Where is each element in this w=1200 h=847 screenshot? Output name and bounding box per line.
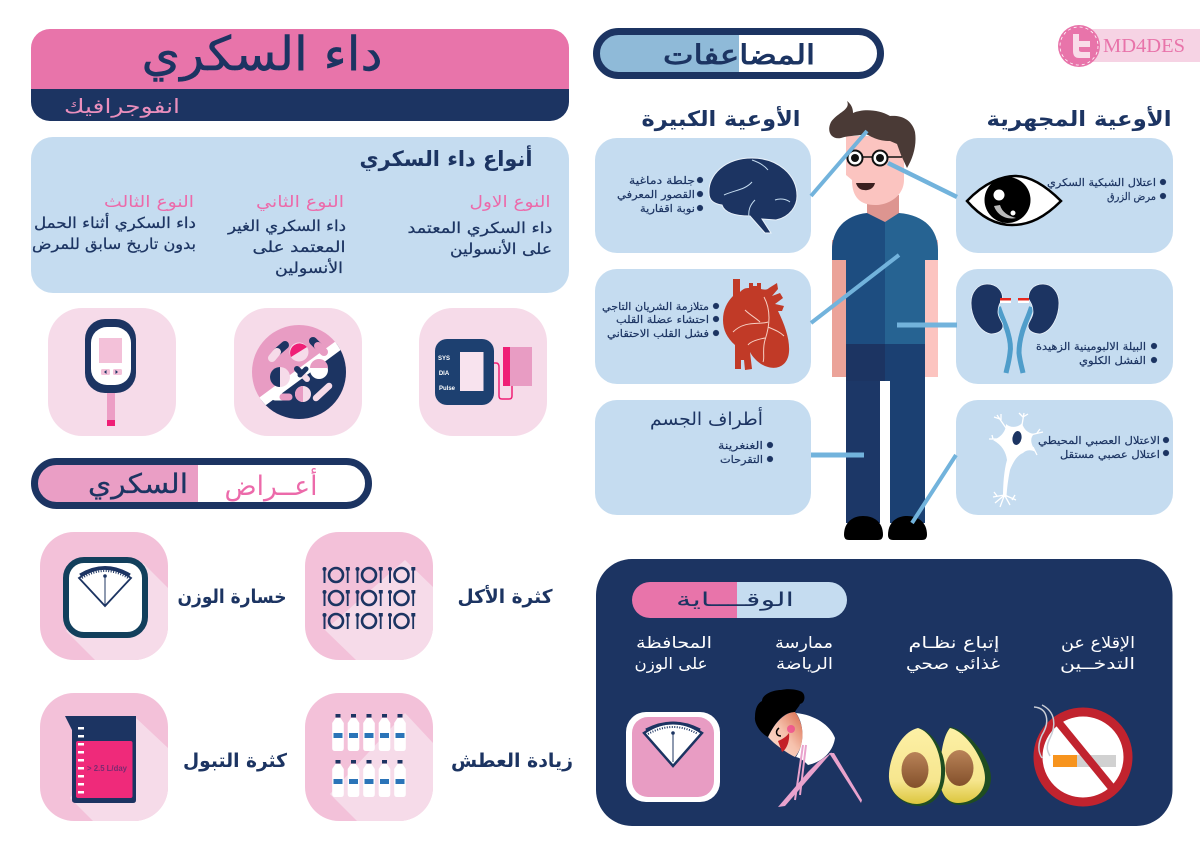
label: exercise: ممارسة [775,633,833,653]
logo: MD4DES: MD4DES [1103,35,1185,57]
panel: diabetes types [31,137,569,293]
icon: avocado [889,727,991,806]
label: exercise: الرياضة [776,654,833,674]
icon: blood pressure monitor tile [419,308,547,436]
panel: limbs complications [595,400,811,515]
list: eye conditions: اعتلال الشبكية السكري [1047,177,1156,189]
label: weight loss: خسارة الوزن [178,586,286,608]
trousers [846,344,925,523]
column: type two: المعتمد على [252,238,346,256]
column: type two: داء السكري الغير [227,217,346,236]
heading pill: complications: المضاعفات [663,40,815,71]
label: healthy diet: إتباع نظـام [908,633,1000,653]
glasses [848,150,902,166]
list: nerve conditions [1038,435,1169,461]
icon: neuron [989,413,1043,507]
column: type two: الأنسولين [275,258,343,277]
heading pill: symptoms: السكري [88,469,188,500]
list: kidney conditions: الفشل الكلوي [1079,355,1146,367]
list: heart conditions: فشل القلب الاحتقاني [607,328,709,340]
label: healthy diet: غذائي صحي [906,654,1000,674]
monitor labels: DIA [439,371,450,377]
list: limb conditions [718,440,773,466]
list: eye conditions: مرض الزرق [1107,191,1156,203]
icon: glucometer tile [48,308,176,436]
heading: limbs: أطراف الجسم [650,407,763,430]
logo: MD4DES [1058,25,1200,67]
list: limb conditions: التقرحات [720,454,763,466]
label: overeating: كثرة الأكل [458,585,553,608]
list: brain conditions [617,175,703,215]
icon: pills tile [234,308,362,436]
label: maintain weight [634,633,712,674]
panel: title banner [31,27,569,121]
heading pill: symptoms [34,461,369,506]
label: maintain weight: على الوزن [634,654,708,674]
column: type three: داء السكري أثناء الحمل [34,213,196,233]
connector lines [811,131,957,523]
label: quit smoking: الإقلاع عن [1061,633,1135,653]
monitor labels [438,356,456,392]
icon: no smoking [1034,705,1128,802]
column: type three [32,192,196,253]
heading: microvascular: الأوعية المجهرية [986,105,1172,131]
shoes [844,516,927,540]
icon: measuring beaker tile [40,693,168,821]
icon: water bottles tile [305,693,433,821]
list: kidney conditions [1036,341,1157,367]
heading pill: prevention: الوقــــاية [676,589,794,611]
column: type two [227,192,346,277]
label: increased thirst: زيادة العطش [451,750,573,772]
list: brain conditions: القصور المعرفي [617,189,695,201]
heading pill: complications [596,31,881,76]
list: heart conditions: احتشاء عضلة القلب [616,314,709,326]
column: type one [408,192,552,258]
icon: eye [967,176,1061,225]
arms [832,240,938,377]
column: type two: النوع الثاني [256,192,344,212]
list: brain conditions: جلطة دماغية [629,175,695,187]
label: frequent urination: كثرة التبول [183,750,288,772]
icon: kidneys [971,284,1059,373]
monitor labels: SYS [438,356,450,362]
column: type one: داء السكري المعتمد [408,219,552,238]
panel: prevention [596,559,1172,826]
panel: kidney complications [956,269,1173,384]
list: brain conditions: نوبة اقفارية [640,203,695,215]
icon: pink weight scale [626,712,720,802]
icon: weight scale tile [40,532,168,660]
beaker reading: > 2.5 L/day [87,763,127,773]
list: heart conditions [602,301,719,340]
subtitle: انفوجرافيك [64,94,180,118]
label: quit smoking: التدخــين [1060,654,1135,674]
panel: brain complications [595,138,811,253]
panel: eye complications [956,138,1173,253]
label: quit smoking [1060,633,1135,674]
list: heart conditions: متلازمة الشريان التاجي [602,301,709,313]
column: type three: بدون تاريخ سابق للمرض [32,235,196,253]
icon: brain [709,158,797,233]
list: kidney conditions: البيلة الالبومينية الزهيدة [1036,341,1146,353]
shirt [832,213,938,344]
heading pill: prevention [632,582,847,618]
column: type three: النوع الثالث [104,192,194,212]
column: type one: النوع الاول [470,192,550,212]
label: maintain weight: المحافظة [636,633,712,652]
panel: heart complications [595,269,811,384]
heading pill: symptoms: أعــراض [224,467,318,502]
face [846,136,904,205]
label: healthy diet [906,633,1000,674]
monitor labels: Pulse [439,386,456,392]
title: داء السكري [142,27,382,82]
column: type one: على الأنسولين [450,239,552,258]
label: exercise [775,633,833,674]
icon: heart [723,279,789,370]
icon: exercising woman [755,689,862,807]
mouth [856,183,875,190]
heading: macrovascular: الأوعية الكبيرة [642,105,800,131]
hair [829,101,916,168]
panel: nerve complications [956,400,1173,515]
figure: man [829,101,938,540]
list: nerve conditions: اعتلال عصبي مستقل [1060,449,1160,461]
list: eye conditions [1047,177,1166,203]
neck [867,195,899,225]
list: limb conditions: الغنغرينة [718,440,763,452]
heading: types of diabetes: أنواع داء السكري [360,144,532,172]
list: nerve conditions: الاعتلال العصبي المحيطي [1038,435,1160,447]
icon: plates tile [305,532,433,660]
